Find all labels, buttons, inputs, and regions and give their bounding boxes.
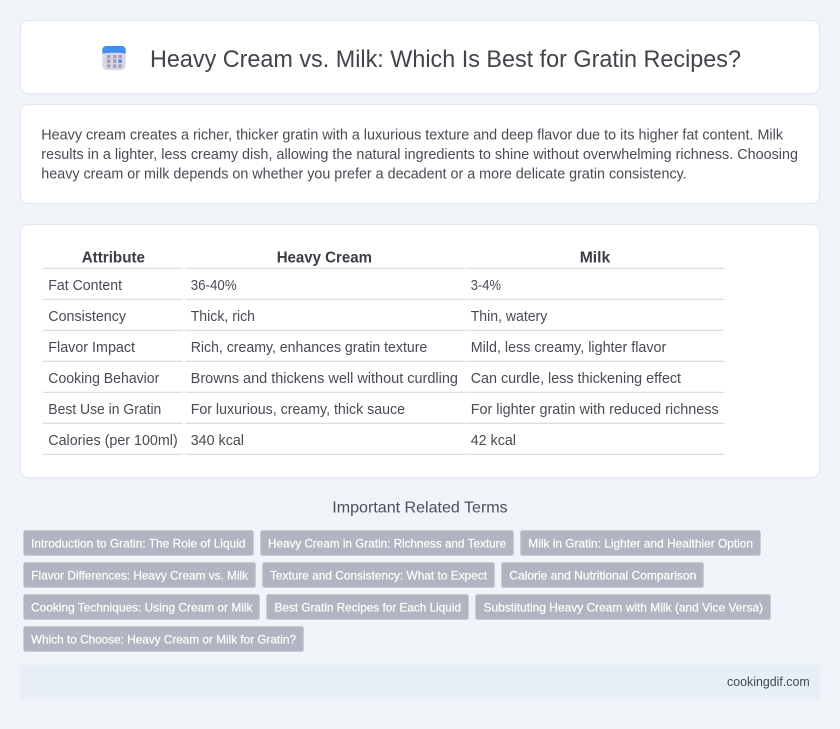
tag: Cooking Techniques: Using Cream or Milk [31, 600, 253, 614]
tag [476, 594, 770, 620]
table row: fat content: Fat Content [48, 278, 122, 294]
table header: Attribute [82, 250, 145, 267]
tag: Flavor Differences: Heavy Cream vs. Milk [31, 568, 249, 582]
table row: cooking behavior: Can curdle, less thickening effect [471, 371, 681, 387]
tag [24, 530, 254, 556]
tag [502, 562, 704, 588]
tag: Which to Choose: Heavy Cream or Milk for Gratin? [31, 632, 296, 646]
table row: best use in gratin: For luxurious, creamy, thick sauce [191, 402, 405, 418]
tag [260, 530, 514, 556]
table row: flavor impact: Mild, less creamy, lighter flavor [471, 340, 666, 356]
tag: Texture and Consistency: What to Expect [270, 568, 488, 582]
heading: important related terms: Important Related Terms [332, 500, 508, 517]
text block: introduction paragraph: heavy cream or milk depends on whether you prefer a decadent or a more delicate gratin consistency. [41, 166, 687, 182]
table header [43, 250, 724, 268]
table row: consistency [43, 309, 724, 330]
table row: best use in gratin: Best Use in Gratin [48, 402, 161, 418]
table row: cooking behavior: Cooking Behavior [48, 371, 160, 387]
title: Heavy Cream vs. Milk: Which Is Best for Gratin Recipes? [150, 46, 741, 73]
table row: calories [43, 433, 724, 454]
table row: flavor impact [43, 340, 724, 361]
panel: introduction [20, 104, 820, 204]
table header: Milk [580, 250, 610, 267]
tag list: related terms [24, 530, 770, 652]
panel: header [20, 20, 820, 94]
footer [20, 665, 820, 699]
text block: introduction paragraph [41, 127, 798, 182]
tag [24, 594, 260, 620]
table row: fat content [43, 278, 724, 299]
table row: flavor impact: Rich, creamy, enhances gratin texture [191, 340, 427, 356]
tag [24, 562, 256, 588]
table row: calories: 340 kcal [191, 433, 244, 449]
text block: introduction paragraph: results in a lighter, less creamy dish, allowing the natural ingredients to shine without overwhelming richness. Choosing [41, 147, 798, 163]
tag [266, 594, 468, 620]
table row: calories: Calories (per 100ml) [48, 433, 178, 449]
tag [520, 530, 760, 556]
tag [24, 626, 304, 652]
table row: consistency: Consistency [48, 309, 127, 325]
text block: introduction paragraph: Heavy cream creates a richer, thicker gratin with a luxurious texture and deep flavor due to its higher fat content. Milk [41, 127, 784, 143]
table row: best use in gratin [43, 402, 724, 423]
tag: Heavy Cream in Gratin: Richness and Texture [268, 536, 506, 550]
tag: Substituting Heavy Cream with Milk (and Vice Versa) [484, 600, 763, 614]
tag: Introduction to Gratin: The Role of Liquid [31, 536, 246, 550]
tag: Best Gratin Recipes for Each Liquid [274, 600, 461, 614]
table row: fat content: 36-40% [191, 278, 237, 294]
tag: Calorie and Nutritional Comparison [509, 568, 696, 582]
table row: consistency: Thick, rich [191, 309, 255, 325]
tag: Milk in Gratin: Lighter and Healthier Option [528, 536, 753, 550]
table header: Heavy Cream [277, 250, 372, 267]
table row: best use in gratin: For lighter gratin with reduced richness [471, 402, 719, 418]
table row: fat content: 3-4% [471, 278, 501, 294]
table row: cooking behavior: Browns and thickens well without curdling [191, 371, 458, 387]
table row: consistency: Thin, watery [471, 309, 548, 325]
icon: calendar [102, 46, 126, 70]
table row: flavor impact: Flavor Impact [48, 340, 135, 356]
panel: comparison table [20, 224, 820, 478]
table row: calories: 42 kcal [471, 433, 516, 449]
footer source text: cookingdif.com [727, 675, 810, 689]
table row: cooking behavior [43, 371, 724, 392]
tag [262, 562, 494, 588]
